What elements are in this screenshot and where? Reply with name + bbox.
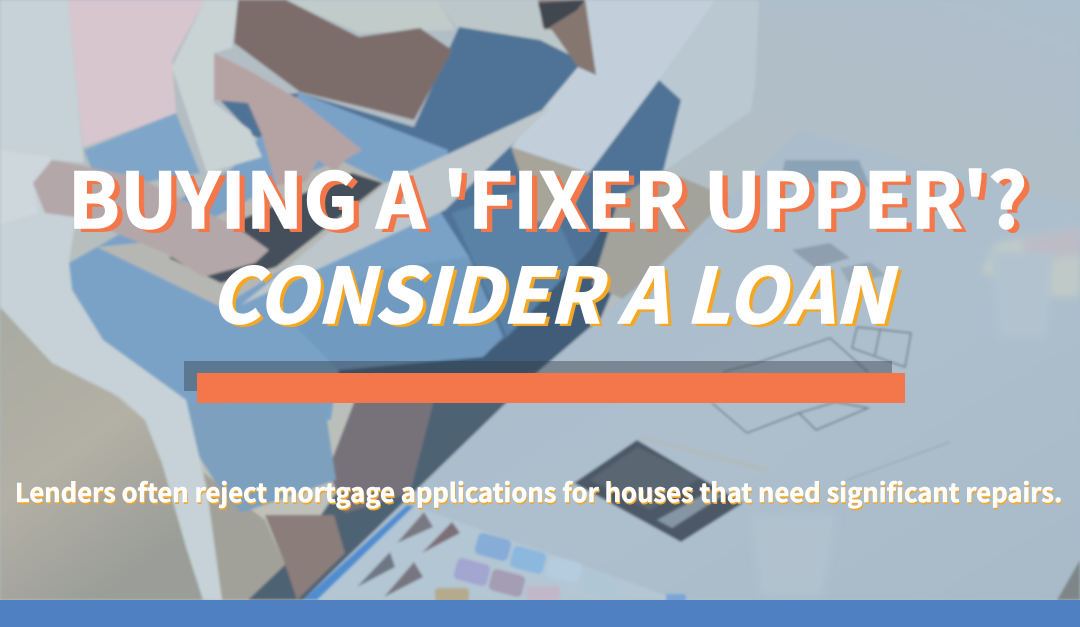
colour fan and glass, soft focus <box>750 227 1080 595</box>
divider bar <box>197 373 905 403</box>
swatch booklet <box>303 506 680 600</box>
woman's lap jeans <box>69 93 503 420</box>
laptop base <box>97 160 386 307</box>
calculator <box>574 440 743 542</box>
subtitle: Lenders often reject mortgage applications for houses that need significant repairs. <box>15 473 1062 510</box>
sofa seat <box>0 300 203 600</box>
man's arm and fist <box>234 0 452 120</box>
table <box>303 130 1080 600</box>
jeans cuff <box>190 400 336 513</box>
footer band <box>0 600 1080 627</box>
divider bar shadow <box>184 361 892 391</box>
beige floor strip <box>511 147 589 222</box>
cardigan sleeve <box>172 0 262 173</box>
tablet on the table <box>781 160 870 187</box>
drawing details <box>792 243 850 268</box>
title line 2: CONSIDER A LOAN <box>210 235 891 345</box>
woman's left forearm and hand <box>214 53 362 185</box>
far leg <box>328 400 434 513</box>
floor plan lines <box>712 327 911 433</box>
man's left hand and watch <box>538 0 596 75</box>
white sofa behind <box>659 0 759 172</box>
cardigan left panel <box>0 0 222 600</box>
jeans waist <box>84 113 200 190</box>
near leg <box>265 515 345 600</box>
keyboard <box>169 173 383 283</box>
pen <box>637 436 768 472</box>
plans held in hand <box>511 0 715 173</box>
laptop lid <box>241 105 553 305</box>
woman's right arm and hand <box>33 160 269 277</box>
man's jeans <box>220 27 681 400</box>
title line 1: BUYING A 'FIXER UPPER'? <box>68 140 1028 250</box>
shirt of the man <box>286 0 455 33</box>
pink top <box>68 0 205 147</box>
dark floor under the table <box>248 370 540 600</box>
